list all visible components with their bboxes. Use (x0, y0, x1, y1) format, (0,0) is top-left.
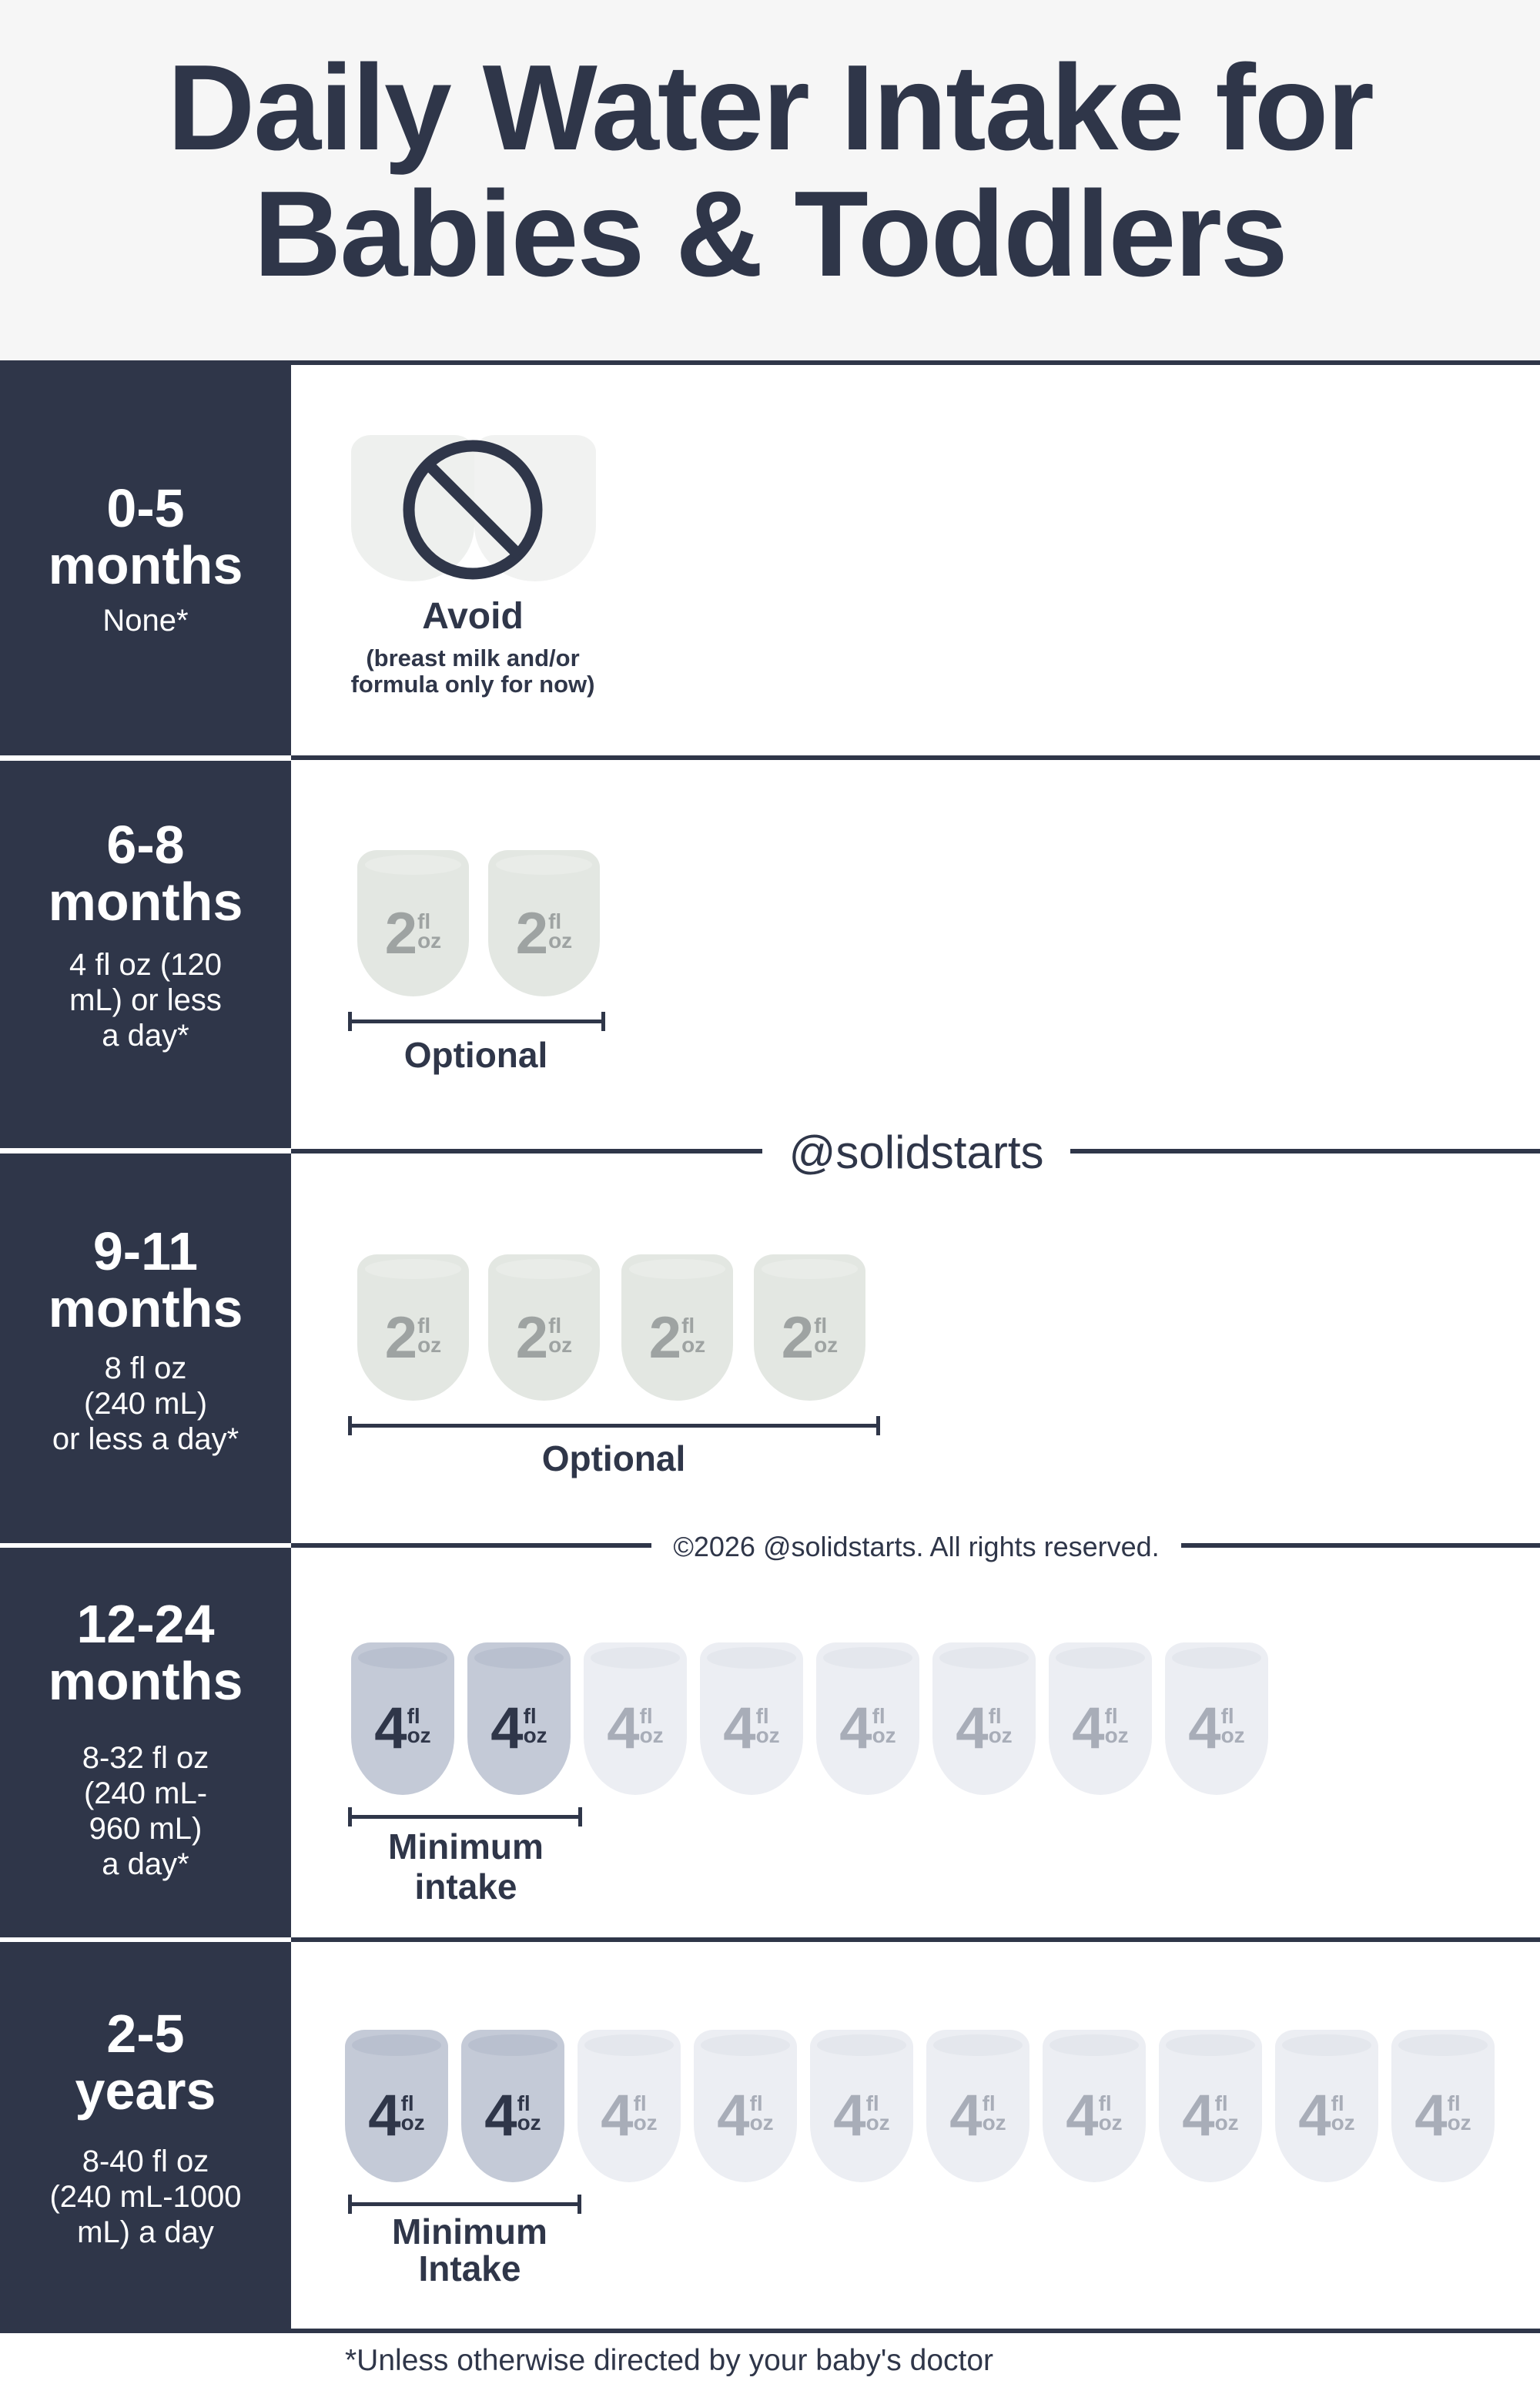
cups: 6-8 months: 2 (516, 901, 548, 966)
cups: 2-5 years: fl (401, 2091, 414, 2115)
cups: 12-24 months: fl (524, 1704, 537, 1728)
cups: 9-11 months: 2 (385, 1305, 417, 1371)
cups: 2-5 years: fl (983, 2091, 996, 2115)
cups: 6-8 months: oz (548, 929, 572, 953)
bracket: optional 6-8 (348, 1020, 605, 1023)
watermark: @solidstarts: @solidstarts (788, 1127, 1044, 1178)
bracket: optional 9-11 (348, 1424, 880, 1428)
left column blocks (0, 360, 291, 755)
label: 0-5 months (49, 478, 243, 638)
label: 2-5 years (49, 2004, 242, 2249)
cups: 12-24 months (351, 1642, 1268, 1795)
cups: 2-5 years: oz (1215, 2111, 1239, 2135)
cups: 2-5 years: oz (866, 2111, 890, 2135)
cups: 12-24 months: oz (1105, 1723, 1129, 1747)
title: Daily Water Intake for (167, 40, 1373, 176)
cups: 12-24 months: fl (640, 1704, 653, 1728)
cups: 12-24 months: oz (407, 1723, 431, 1747)
cups: 2-5 years: fl (1448, 2091, 1461, 2115)
cups: 9-11 months: oz (548, 1333, 572, 1357)
label: 9-11 months: (240 mL) (84, 1387, 207, 1421)
cups: 12-24 months: 4 (839, 1696, 872, 1761)
cups: 9-11 months: oz (681, 1333, 705, 1357)
text: avoid: Avoid (422, 596, 524, 637)
cups: 2-5 years: fl (1099, 2091, 1112, 2115)
cups: 12-24 months: oz (640, 1723, 664, 1747)
cups: 2-5 years (345, 2030, 1495, 2182)
cups: 2-5 years: 4 (833, 2083, 866, 2148)
label: minimum intake 2-5 (392, 2212, 547, 2289)
cups: 2-5 years: 4 (601, 2083, 634, 2148)
cups: 9-11 months: fl (417, 1314, 430, 1338)
cups: 6-8 months: oz (417, 929, 441, 953)
label: 12-24 months: a day* (102, 1847, 189, 1881)
cups: 2-5 years: oz (401, 2111, 425, 2135)
bracket: minimum 12-24 (348, 1815, 582, 1819)
label: minimum intake 12-24: Minimum (388, 1826, 544, 1867)
header background (0, 0, 1540, 360)
cups: 2-5 years: oz (1099, 2111, 1123, 2135)
cups: 2-5 years: 4 (1414, 2083, 1448, 2148)
cups: 12-24 months: oz (989, 1723, 1013, 1747)
label: 12-24 months: 960 mL) (89, 1812, 202, 1846)
bracket: minimum 2-5 (348, 2202, 581, 2206)
label: 2-5 years: 2-5 (106, 2004, 185, 2064)
cups: 9-11 months: oz (417, 1333, 441, 1357)
cups: 12-24 months: 4 (607, 1696, 640, 1761)
cups: 12-24 months: fl (1105, 1704, 1118, 1728)
cups: 2-5 years: fl (634, 2091, 647, 2115)
cups: 6-8 months: fl (548, 909, 561, 933)
cups: 12-24 months: oz (872, 1723, 896, 1747)
label: minimum intake 2-5: Minimum (392, 2212, 547, 2252)
label: 0-5 months: None* (102, 604, 189, 638)
text: avoid (351, 596, 594, 698)
cups: 6-8 months: 2 (385, 901, 417, 966)
cups: 2-5 years: 4 (1182, 2083, 1215, 2148)
cups: 2-5 years: oz (983, 2111, 1006, 2135)
label: minimum intake 12-24 (388, 1826, 544, 1907)
cups: 2-5 years: 4 (1066, 2083, 1099, 2148)
cups: 2-5 years: fl (517, 2091, 531, 2115)
text: avoid: (breast milk and/or (366, 645, 580, 671)
label: optional 6-8: Optional (404, 1035, 547, 1075)
label: 6-8 months: 6-8 (106, 815, 185, 875)
label: 2-5 years: mL) a day (77, 2215, 214, 2249)
label: 9-11 months: 9-11 (93, 1221, 198, 1281)
label: 12-24 months: 12-24 (76, 1594, 215, 1654)
cups: 9-11 months: oz (814, 1333, 838, 1357)
cups: 2-5 years: 4 (949, 2083, 983, 2148)
cups: 12-24 months: 4 (490, 1696, 524, 1761)
label: 6-8 months: a day* (102, 1019, 189, 1053)
cups: 12-24 months: fl (756, 1704, 769, 1728)
cups: 12-24 months: oz (756, 1723, 780, 1747)
cups: 2-5 years: 4 (484, 2083, 517, 2148)
cups: 9-11 months: fl (814, 1314, 827, 1338)
title: Babies & Toddlers (253, 166, 1287, 302)
cups: 12-24 months: fl (1221, 1704, 1234, 1728)
label: 9-11 months: or less a day* (52, 1422, 239, 1456)
cups: 9-11 months: 2 (782, 1305, 814, 1371)
cups: 2-5 years: fl (1331, 2091, 1344, 2115)
label: 12-24 months (49, 1594, 243, 1881)
cups: 2-5 years: 4 (368, 2083, 401, 2148)
cups: 12-24 months: 4 (374, 1696, 407, 1761)
cups: 9-11 months: fl (548, 1314, 561, 1338)
cups: 12-24 months: oz (1221, 1723, 1245, 1747)
label: minimum intake 2-5: Intake (419, 2248, 521, 2289)
label: minimum intake 12-24: intake (415, 1867, 517, 1907)
copyright: ©2026 @solidstarts. All rights reserved. (673, 1531, 1160, 1562)
cups: 2-5 years: 4 (717, 2083, 750, 2148)
cups: 12-24 months: fl (872, 1704, 886, 1728)
label: 12-24 months: months (49, 1651, 243, 1711)
title (167, 40, 1373, 302)
cups: 9-11 months (357, 1254, 865, 1401)
cups: 12-24 months: fl (989, 1704, 1002, 1728)
label: 9-11 months: months (49, 1278, 243, 1338)
cups: 2-5 years: fl (866, 2091, 879, 2115)
label: 0-5 months: months (49, 535, 243, 595)
cups: 9-11 months: 2 (516, 1305, 548, 1371)
text: avoid: formula only for now) (351, 671, 594, 698)
label: 0-5 months: 0-5 (106, 478, 185, 538)
row dividers (291, 360, 1540, 365)
label: optional 9-11: Optional (542, 1438, 685, 1478)
footnote: *Unless otherwise directed by your baby's doctor (345, 2344, 993, 2377)
cups: 2-5 years: oz (750, 2111, 774, 2135)
cups: 2-5 years: oz (1331, 2111, 1355, 2135)
cups: 6-8 months (357, 850, 600, 996)
label: 12-24 months: (240 mL- (84, 1776, 207, 1810)
label: 6-8 months (49, 815, 243, 1053)
cups: 12-24 months: 4 (1188, 1696, 1221, 1761)
label: 6-8 months: months (49, 872, 243, 932)
cups: 12-24 months: 4 (723, 1696, 756, 1761)
label: 2-5 years: (240 mL-1000 (49, 2180, 242, 2214)
cups: 2-5 years: oz (634, 2111, 658, 2135)
label: 9-11 months: 8 fl oz (105, 1351, 186, 1385)
label: 12-24 months: 8-32 fl oz (82, 1741, 209, 1775)
cups: 12-24 months: 4 (956, 1696, 989, 1761)
cups: 6-8 months: fl (417, 909, 430, 933)
cups: 12-24 months: 4 (1072, 1696, 1105, 1761)
cups: 9-11 months: 2 (649, 1305, 681, 1371)
label: 6-8 months: 4 fl oz (120 (69, 948, 222, 982)
cups: 2-5 years: 4 (1298, 2083, 1331, 2148)
label: 9-11 months (49, 1221, 243, 1456)
cups: 2-5 years: oz (517, 2111, 541, 2135)
cups: 12-24 months: oz (524, 1723, 547, 1747)
cups: 12-24 months: fl (407, 1704, 420, 1728)
cups: 2-5 years: fl (750, 2091, 763, 2115)
cups: 9-11 months: fl (681, 1314, 695, 1338)
label: 2-5 years: 8-40 fl oz (82, 2145, 209, 2178)
cups: 2-5 years: oz (1448, 2111, 1471, 2135)
label: 2-5 years: years (75, 2061, 216, 2121)
label: 6-8 months: mL) or less (69, 983, 222, 1017)
icon: avoid cups with prohibition sign (351, 435, 596, 581)
cups: 2-5 years: fl (1215, 2091, 1228, 2115)
